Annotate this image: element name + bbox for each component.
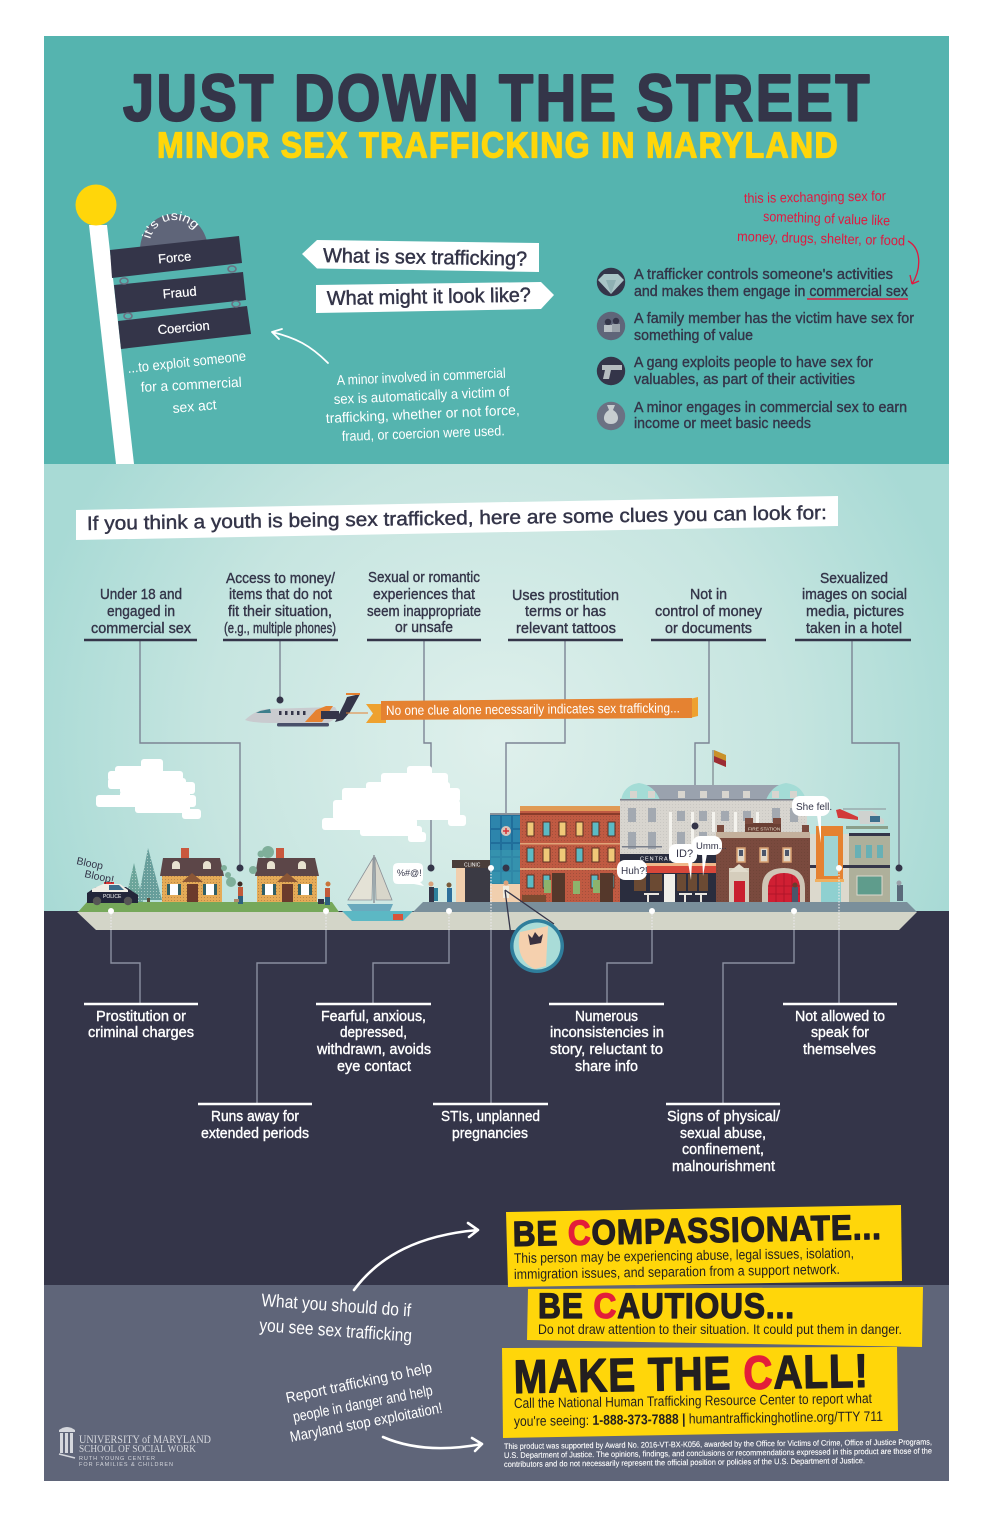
siren text: Bloop — [75, 855, 104, 873]
clue: prostitution or criminal charges — [84, 1004, 198, 1041]
speech bubble: umm — [692, 836, 727, 876]
plank: fraud: Fraud — [162, 284, 197, 301]
clue: runs away: extended periods — [201, 1126, 309, 1142]
lower clue connector lines — [111, 868, 839, 1104]
logo: FOR FAMILIES & CHILDREN — [79, 1462, 173, 1468]
logo: UNIVERSITY of MARYLAND — [79, 1432, 211, 1446]
fire station: FIRE STATION — [748, 826, 781, 832]
callout: be cautious — [527, 1287, 923, 1347]
clue: signs of abuse: sexual abuse, — [680, 1126, 766, 1142]
logo — [59, 1427, 211, 1468]
speech bubble: she fell — [792, 796, 832, 843]
speech bubble: ID: ID? — [676, 848, 693, 860]
clue: inconsistencies: story, reluctant to — [550, 1042, 663, 1058]
item: trafficker: A trafficker controls someone's activities — [634, 267, 893, 283]
icon: columns — [59, 1427, 75, 1458]
minor note: sex is automatically a victim of — [333, 383, 510, 407]
clue: runs away: Runs away for — [211, 1109, 299, 1125]
clue: fearful: Fearful, anxious, — [321, 1009, 426, 1025]
clue: sexual or romantic: Sexual or romantic — [368, 570, 480, 586]
plank: coercion: Coercion — [157, 318, 210, 337]
ground strip — [77, 912, 917, 930]
exploit note: ...to exploit someone — [127, 348, 247, 376]
red arrow — [908, 241, 919, 284]
title: JUST DOWN THE STREET — [123, 60, 872, 134]
clue: STIs — [433, 1104, 548, 1142]
pole ball — [76, 184, 116, 226]
upper clue connector lines — [140, 640, 899, 868]
minor note: fraud, or coercion were used. — [342, 422, 505, 444]
banner line — [346, 712, 368, 714]
clue: not allowed to speak: speak for — [811, 1025, 869, 1041]
exploit note — [127, 348, 247, 416]
blue building — [490, 813, 521, 902]
pole — [89, 225, 134, 464]
handwritten: report trafficking: people in danger and help — [292, 1382, 434, 1426]
callout: be cautious: BE CAUTIOUS... — [538, 1287, 795, 1326]
banner: no one clue: No one clue alone necessarily indicates sex trafficking... — [386, 700, 680, 718]
callout: be compassionate — [506, 1205, 902, 1287]
cafe — [620, 854, 716, 902]
police car: POLICE — [103, 894, 122, 900]
handwritten: report trafficking: Report trafficking to help — [284, 1359, 434, 1407]
speech bubble: huh: Huh?! — [621, 866, 648, 877]
clue: signs of abuse: confinement, — [682, 1142, 764, 1158]
funding disclaimer: contributors and do not necessarily represent the official position or policies of the U.S. Department of Justice. — [504, 1456, 865, 1469]
item: minor — [634, 400, 907, 432]
minor note: A minor involved in commercial — [336, 365, 506, 388]
trees — [125, 848, 162, 902]
callout: make the call: MAKE THE CALL! — [513, 1344, 869, 1403]
clue: under 18 — [84, 587, 197, 640]
clue: not allowed to speak: themselves — [803, 1042, 876, 1058]
clue: prostitution terms: relevant tattoos — [516, 621, 616, 637]
clue: not allowed to speak — [783, 1004, 897, 1058]
callout: be compassionate: BE COMPASSIONATE... — [512, 1208, 882, 1254]
plank: force — [110, 236, 242, 278]
callout: make the call — [502, 1344, 898, 1438]
clue: runs away — [198, 1104, 312, 1142]
clue: sexual or romantic — [367, 570, 481, 640]
red note: something of value like — [763, 208, 891, 228]
clue: not in control — [651, 587, 766, 640]
clue: prostitution or criminal charges: criminal charges — [88, 1025, 194, 1041]
people — [234, 880, 903, 905]
arrow: to make the call — [383, 1437, 482, 1451]
house right — [255, 848, 319, 902]
cloud left — [96, 759, 201, 819]
callout: be compassionate: immigration issues, and separation from a support network. — [514, 1261, 840, 1282]
arrow: to be compassionate — [354, 1223, 478, 1290]
speech bubble: symbols — [393, 863, 424, 886]
fire station — [716, 818, 810, 902]
tattoo magnifier — [505, 890, 564, 973]
clue: signs of abuse — [666, 1104, 781, 1175]
sailboat — [347, 855, 393, 911]
item: minor: income or meet basic needs — [634, 416, 811, 432]
plank: fraud — [114, 272, 246, 314]
clue: signs of abuse: malnourishment — [672, 1159, 775, 1175]
handwritten: what you should do — [259, 1290, 413, 1346]
it's using badge — [140, 212, 206, 247]
clue: signs of abuse: Signs of physical/ — [667, 1109, 781, 1125]
clue: sexualized images: Sexualized — [820, 571, 888, 587]
clue: inconsistencies: inconsistencies in — [550, 1025, 664, 1041]
clue: inconsistencies: Numerous — [575, 1009, 638, 1025]
house left — [160, 848, 224, 902]
clue: under 18: Under 18 and — [100, 587, 182, 603]
clue: access to money: items that do not — [229, 587, 332, 603]
siren text — [75, 855, 115, 886]
clue: under 18: commercial sex — [91, 621, 192, 637]
panel: what is sex trafficking (teal) — [44, 36, 949, 464]
street — [413, 902, 917, 912]
clues banner: If you think a youth is being sex trafficked, here are some clues you can look for: — [87, 502, 827, 535]
item: gang: A gang exploits people to have sex for — [634, 355, 873, 371]
clue: sexual or romantic: experiences that — [373, 587, 475, 603]
clue: fearful: eye contact — [337, 1059, 411, 1075]
item: family member: A family member has the victim have sex for — [634, 311, 914, 327]
icon: diamond — [597, 268, 625, 296]
clue: prostitution terms — [508, 588, 623, 640]
logo: SCHOOL OF SOCIAL WORK — [79, 1444, 197, 1455]
clue: fearful — [316, 1004, 431, 1075]
grass — [78, 902, 339, 912]
plank: coercion — [118, 306, 251, 349]
banner: no one clue — [366, 697, 698, 723]
clue: access to money: (e.g., multiple phones) — [224, 621, 336, 637]
item: family member — [634, 311, 914, 344]
cloud right — [322, 766, 466, 842]
callout: make the call: Call the National Human Trafficking Resource Center to report what — [514, 1390, 872, 1411]
icon: gun — [597, 357, 625, 385]
red note — [737, 188, 905, 248]
list: types of trafficking — [597, 267, 914, 432]
clue: sexualized images: media, pictures — [806, 604, 904, 620]
plank rings — [120, 266, 240, 319]
clue: sexual or romantic: or unsafe — [395, 620, 453, 636]
siren text: Bloop! — [83, 868, 115, 886]
handwritten: what you should do: you see sex trafficking — [259, 1315, 413, 1346]
subtitle: MINOR SEX TRAFFICKING IN MARYLAND — [157, 124, 839, 166]
callout: make the call: you're seeing: 1-888-373-7888 | humantraffickinghotline.org/TTY 711 — [514, 1408, 883, 1429]
clue: sexualized images: taken in a hotel — [806, 621, 902, 637]
handwritten: report trafficking: Maryland stop exploitation! — [289, 1400, 444, 1446]
funding disclaimer — [504, 1438, 932, 1469]
plank: force: Force — [157, 249, 192, 266]
clue: not in control: control of money — [655, 604, 763, 620]
plane — [245, 693, 360, 726]
clues banner — [76, 496, 838, 540]
exploit note: sex act — [172, 396, 217, 416]
clue: prostitution or criminal charges: Prostitution or — [96, 1009, 186, 1025]
clue: fearful: withdrawn, avoids — [316, 1042, 431, 1058]
clue: sexualized images — [795, 571, 911, 640]
upper connector dots — [236, 696, 902, 872]
clue: access to money — [223, 571, 338, 640]
clue: prostitution terms: Uses prostitution — [512, 588, 619, 604]
callout: be compassionate: This person may be experiencing abuse, legal issues, isolation, — [514, 1245, 854, 1266]
exploit note: for a commercial — [140, 374, 242, 395]
speech bubble: she fell: She fell. — [796, 802, 832, 813]
clue: inconsistencies: share info — [575, 1059, 638, 1075]
question flag: what is sex trafficking — [302, 240, 539, 272]
clue: STIs: STIs, unplanned — [441, 1109, 540, 1125]
question flag: what is sex trafficking: What is sex trafficking? — [323, 245, 527, 271]
red note: money, drugs, shelter, or food — [737, 228, 905, 248]
funding disclaimer: U.S. Department of Justice. The opinions, findings, and conclusions or recommendations expressed in this product are those of the — [504, 1447, 932, 1460]
minor note: trafficking, whether or not force, — [325, 402, 520, 426]
crab — [393, 914, 403, 920]
clue: sexual or romantic: seem inappropriate — [367, 604, 481, 620]
item: family member: something of value — [634, 328, 753, 344]
speech bubble: umm: Umm... — [696, 841, 727, 852]
flag — [713, 750, 726, 785]
speech bubble: ID — [669, 844, 697, 880]
clue: fearful: depressed, — [340, 1025, 407, 1041]
arrow to sign — [272, 329, 328, 363]
house trees — [221, 846, 274, 887]
clue: sexualized images: images on social — [802, 587, 907, 603]
clue: access to money: fit their situation, — [228, 604, 332, 620]
handwritten: what you should do: What you should do if — [261, 1290, 413, 1321]
clinic: CLINIC — [464, 862, 481, 868]
speech bubble: symbols: %#@! — [397, 868, 422, 878]
panel: what to do section — [44, 1285, 949, 1481]
hospital — [810, 826, 890, 902]
panel: sky scene background — [44, 464, 949, 912]
water — [342, 911, 413, 921]
helicopter — [836, 809, 888, 829]
question flag: what might it look like: What might it look like? — [327, 284, 531, 310]
clue: access to money: Access to money/ — [226, 571, 336, 587]
cafe: CENTRAL — [640, 856, 673, 862]
panel: dark clues section — [44, 911, 949, 1285]
minor note — [325, 365, 520, 444]
funding disclaimer: This product was supported by Award No. 2016-VT-BX-K056, awarded by the Office for Victims of Crime, Office of Justice Programs, — [504, 1438, 932, 1451]
white mansion — [620, 783, 807, 856]
clinic — [452, 860, 492, 902]
item: trafficker — [634, 267, 909, 300]
icon: family — [597, 312, 625, 340]
item: gang — [634, 355, 873, 388]
clue: prostitution terms: terms or has — [525, 604, 606, 620]
it's using badge: it's using — [142, 212, 198, 238]
item: gang: valuables, as part of their activities — [634, 372, 855, 388]
clue: inconsistencies — [549, 1004, 664, 1075]
clue: not in control: Not in — [690, 587, 727, 603]
clue: STIs: pregnancies — [452, 1126, 528, 1142]
brick building — [520, 806, 621, 902]
clue: under 18: engaged in — [107, 604, 175, 620]
handwritten: report trafficking — [284, 1359, 444, 1446]
clue: not in control: or documents — [665, 621, 752, 637]
speech bubble: huh — [617, 860, 648, 880]
item: trafficker: and makes them engage in commercial sex — [634, 284, 909, 300]
item: minor: A minor engages in commercial sex to earn — [634, 400, 907, 416]
logo: RUTH YOUNG CENTER — [79, 1456, 155, 1462]
red note: this is exchanging sex for — [744, 188, 886, 206]
signpost — [76, 184, 251, 464]
lower connector dots — [108, 865, 842, 914]
clue: not allowed to speak: Not allowed to — [795, 1009, 885, 1025]
police car — [87, 882, 138, 905]
callout: be cautious: Do not draw attention to their situation. It could put them in danger. — [538, 1321, 902, 1337]
icon: money bag — [597, 402, 625, 430]
